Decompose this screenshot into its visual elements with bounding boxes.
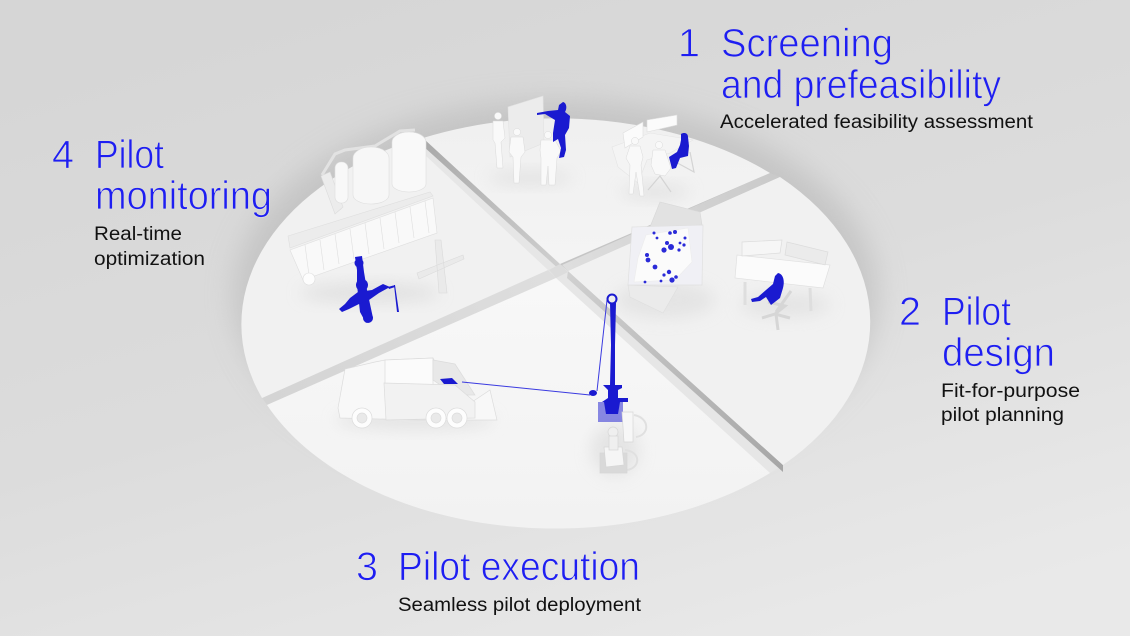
icon: office chair	[762, 291, 791, 330]
icon: rock core	[650, 202, 702, 227]
quadrant 1 surface	[423, 118, 770, 264]
icon: curved desk	[612, 133, 693, 183]
heading: step 4 pilot monitoring: optimization	[94, 249, 205, 270]
step 2 scene: reservoir core model and workstation	[615, 202, 830, 330]
icon: monitors	[623, 122, 643, 148]
heading: step 3 pilot execution: Pilot execution	[398, 545, 640, 589]
heading: step 2 pilot design: pilot planning	[941, 405, 1064, 426]
heading: step 4 pilot monitoring: Pilot	[95, 133, 164, 177]
circular platform	[234, 100, 878, 529]
heading: step 2 pilot design: design	[942, 331, 1055, 375]
icon: pipe rack	[322, 130, 415, 210]
step 4 scene: tanks, trailer and wellheads	[288, 130, 464, 323]
step 1 scene: people at board and control desk	[488, 96, 694, 199]
icon: separator vessel	[335, 162, 348, 203]
heading: step 1 screening and prefeasibility: Screening	[721, 22, 893, 66]
icon: blue seated operator	[669, 133, 689, 169]
heading: step 1 screening and prefeasibility	[678, 22, 1034, 133]
heading: step 3 pilot execution: 3	[356, 545, 378, 589]
icon: truck	[338, 358, 497, 428]
arrow: tubing line from truck to wellhead	[462, 300, 607, 395]
quadrant 4 surface	[241, 141, 548, 398]
icon: blue data points	[644, 230, 686, 283]
gap between quadrants	[562, 173, 780, 271]
icon: standing people in white	[493, 112, 561, 185]
heading: step 3 pilot execution	[356, 545, 642, 616]
icon: seated and standing white people	[626, 137, 694, 196]
icon: white wellhead	[417, 240, 464, 293]
icon: presentation board	[508, 96, 544, 157]
quadrant 2 surface	[568, 177, 870, 465]
heading: step 4 pilot monitoring: Real-time	[94, 224, 182, 245]
icon: blue reel in truck	[440, 378, 458, 384]
heading: step 1 screening and prefeasibility: Accelerated feasibility assessment	[720, 112, 1034, 133]
heading: step 2 pilot design	[899, 290, 1080, 426]
heading: step 1 screening and prefeasibility: and prefeasibility	[721, 63, 1001, 107]
heading: step 2 pilot design: 2	[899, 290, 921, 334]
heading: step 2 pilot design: Pilot	[942, 290, 1011, 334]
heading: step 4 pilot monitoring: monitoring	[95, 174, 272, 218]
heading: step 1 screening and prefeasibility: 1	[678, 22, 700, 66]
icon: blue seated engineer	[751, 273, 784, 305]
icon: blue presenter	[537, 102, 570, 158]
icon: desk with monitors	[735, 255, 830, 288]
step 3 scene: coiled tubing truck and wellsite	[335, 294, 646, 476]
heading: step 4 pilot monitoring: 4	[52, 133, 74, 177]
quadrant 3 surface	[267, 278, 770, 529]
heading: step 4 pilot monitoring	[52, 133, 272, 270]
icon: blue wellhead	[339, 256, 399, 323]
icon: storage tanks	[353, 132, 426, 204]
icon: trailer	[288, 192, 437, 285]
icon: translucent frame with cubes	[628, 225, 703, 285]
heading: step 2 pilot design: Fit-for-purpose	[941, 381, 1080, 402]
heading: step 3 pilot execution: Seamless pilot deployment	[398, 595, 642, 616]
icon: surface equipment	[600, 412, 646, 473]
icon: blue mast and wellhead	[589, 294, 628, 422]
